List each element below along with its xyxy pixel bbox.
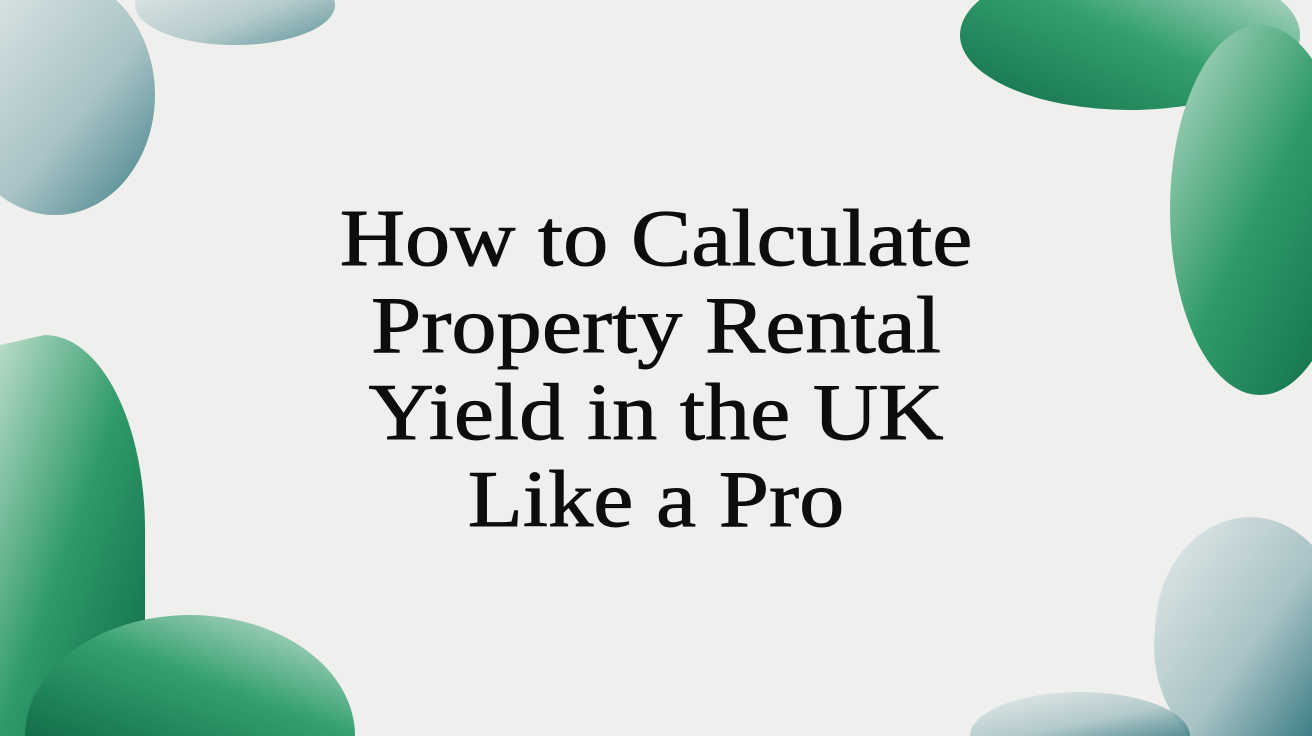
leaves: bottom-right [970,517,1312,736]
leaves: bottom-left [0,335,355,736]
title: How to Calculate [340,196,972,283]
title: Property Rental [371,282,941,370]
title: Like a Pro [468,456,844,544]
leaves: top-left [0,0,335,215]
leaves: top-right [960,0,1312,395]
title [340,196,972,544]
title: Yield in the UK [369,369,943,457]
